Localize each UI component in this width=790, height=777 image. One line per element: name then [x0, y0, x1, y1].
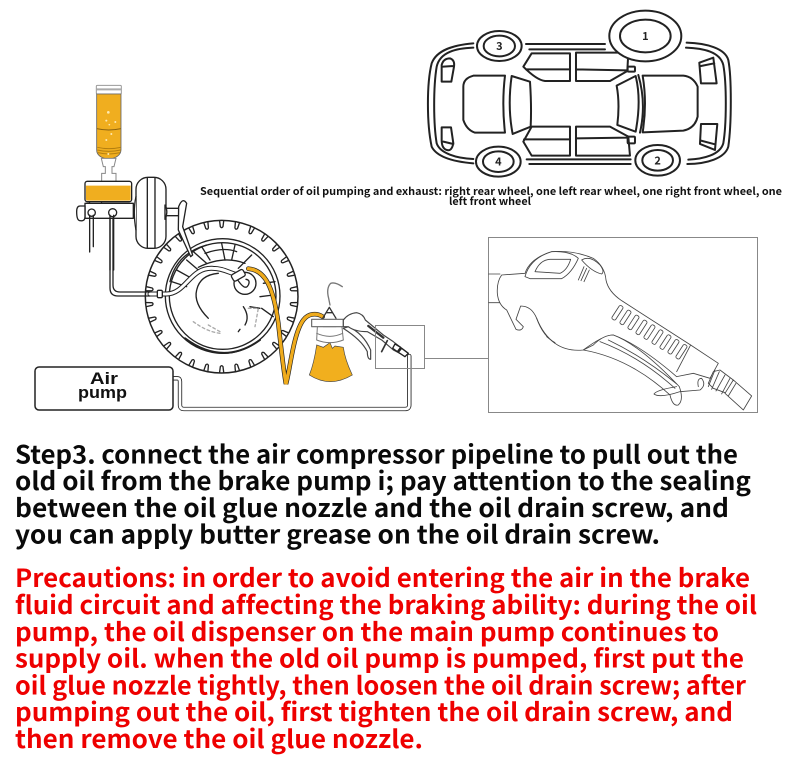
- jar: [309, 324, 352, 382]
- precautions: fluid circuit and affecting the braking ability: during the oil: [15, 586, 757, 622]
- spokes: [170, 243, 275, 317]
- caption: sequential order: left front wheel: [449, 194, 532, 209]
- precautions: pump, the oil dispenser on the main pump continues to: [15, 613, 719, 649]
- master cylinder, booster and oil bottle: [77, 85, 193, 270]
- air pump box: pump: [78, 383, 127, 402]
- caliper: [234, 272, 256, 294]
- collection jar and air gun: [309, 283, 408, 382]
- step 3 instructions: Step3. connect the air compressor pipeline to pull out the: [15, 436, 738, 472]
- brake line from master cylinder: [110, 218, 150, 296]
- yellow drain hose: [248, 269, 323, 384]
- wheel 3: 3: [496, 38, 503, 54]
- wheel 3: [477, 31, 522, 61]
- booster and pedal rod: [134, 177, 193, 257]
- wheel 2: [635, 145, 680, 176]
- caption: sequential order: Sequential order of oil pumping and exhaust: right rear wheel, one left rear wheel, one right front wheel, one: [200, 184, 782, 199]
- gun detail panel: [488, 238, 758, 412]
- tire: [145, 220, 298, 373]
- precautions: pumping out the oil, first tighten the oil drain screw, and: [15, 693, 733, 729]
- car diagram with wheel order: [428, 11, 731, 177]
- hook: [328, 283, 342, 305]
- precautions: Precautions: in order to avoid entering the air in the brake: [15, 559, 750, 595]
- wheel 1: 1: [642, 28, 649, 44]
- wheel 1: [609, 11, 681, 61]
- zoom marker box: [376, 326, 489, 368]
- air pump box: Air: [90, 369, 118, 388]
- precautions: supply oil. when the old oil pump is pumped, first put the: [15, 640, 744, 676]
- gun body: [312, 313, 408, 359]
- wheel with brake disc and hoses: [145, 220, 323, 384]
- master cylinder body: [77, 203, 133, 270]
- step 3 instructions: between the oil glue nozzle and the oil drain screw, and: [15, 489, 729, 525]
- air pump box: [35, 367, 173, 410]
- precautions: oil glue nozzle tightly, then loosen the oil drain screw; after: [15, 666, 746, 702]
- wheel 2: 2: [654, 152, 661, 168]
- step 3 instructions: old oil from the brake pump i; pay attention to the sealing: [15, 462, 751, 498]
- step 3 instructions: [15, 436, 751, 552]
- reservoir: [85, 181, 132, 207]
- wheel 4: [476, 147, 521, 177]
- hub: [193, 273, 258, 333]
- air supply line: [174, 356, 409, 409]
- caption: sequential order: [200, 184, 782, 209]
- precautions: then remove the oil glue nozzle.: [15, 720, 423, 756]
- precautions: [15, 559, 757, 756]
- air gun enlarged: [489, 251, 752, 410]
- oil bottle: [96, 85, 121, 185]
- wheel 4: 4: [495, 154, 502, 170]
- step 3 instructions: you can apply butter grease on the oil drain screw.: [15, 516, 660, 552]
- brake line in wheel: [150, 268, 246, 298]
